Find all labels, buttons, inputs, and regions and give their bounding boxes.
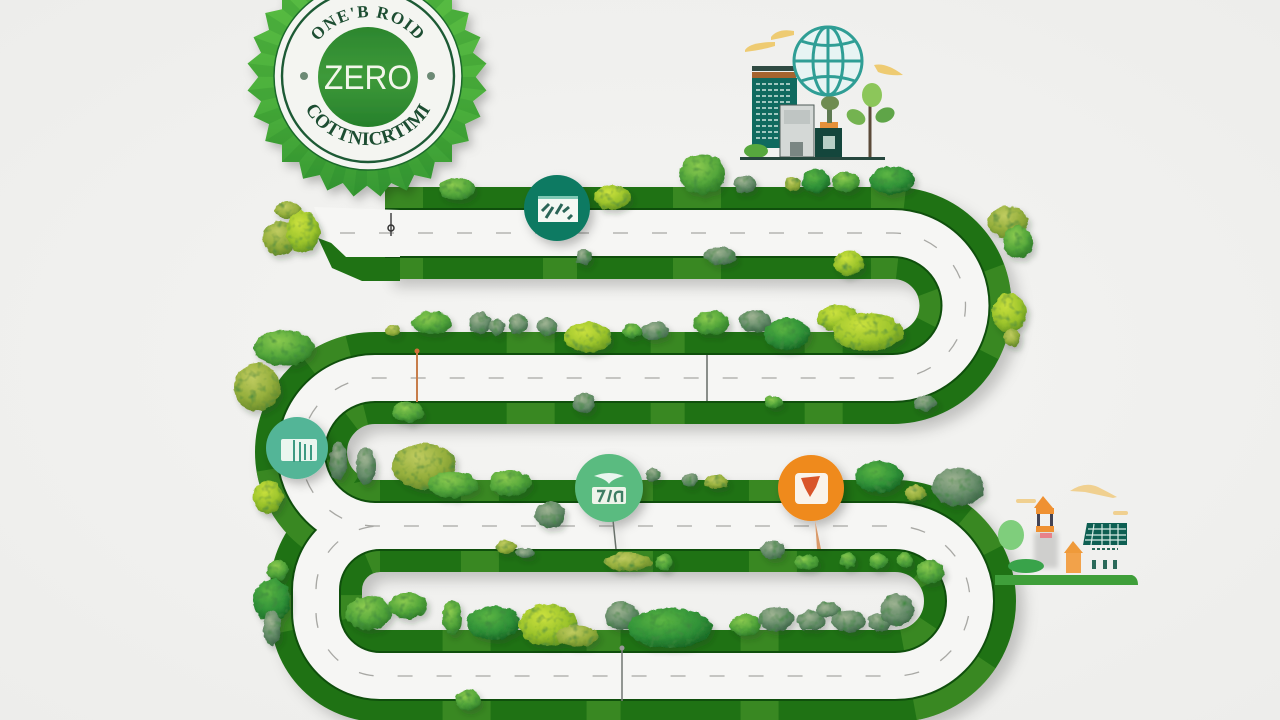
icon: document [538, 196, 578, 222]
illustration: green energy village [995, 485, 1138, 585]
grey building [780, 105, 814, 157]
bushes: below road 3 [496, 540, 944, 584]
dark block with planter [815, 96, 842, 157]
post: grey divider [706, 355, 708, 401]
marker 3: green icon with stem [575, 454, 643, 549]
badge: starburst [240, 0, 494, 204]
badge: top arc text: ONE'B ROID [312, 6, 423, 39]
illustration: city with globe [740, 27, 903, 160]
bushes: top edge of road 1 [438, 154, 915, 209]
badge: zero label: ZERO [324, 59, 412, 97]
post: orange marker [414, 348, 420, 402]
bushes: top edge of road 2 [386, 305, 903, 352]
icon: road sign [592, 473, 626, 504]
post: lower divider [620, 646, 624, 701]
solar panel [1083, 523, 1127, 569]
bushes: below road 2 [392, 393, 936, 422]
marker 1: dark teal icon [524, 175, 590, 241]
badge: white disc [274, 0, 462, 170]
badge: green core [318, 27, 418, 127]
marker 2: light teal icon [266, 417, 328, 479]
badge: bottom arc text: COTTNICRTIMI [308, 103, 430, 146]
clouds [745, 30, 903, 75]
icon: leaf map [795, 473, 828, 504]
shrub [744, 144, 768, 158]
bushes: left and right edge trees [234, 201, 1033, 513]
badge: side dots [300, 72, 435, 80]
orange house [1064, 541, 1083, 573]
winding road [301, 207, 978, 684]
shrubs [1008, 559, 1044, 573]
orange tower [1034, 496, 1054, 538]
bushes: top edge of road 3 [329, 442, 984, 528]
bushes: below road 1 [576, 247, 864, 275]
road posts [388, 213, 707, 701]
badge: inner ring [282, 0, 454, 162]
bushes: lower left and bottom [253, 560, 481, 710]
icon: card [281, 439, 317, 462]
smoke [1034, 532, 1058, 568]
ground base [995, 575, 1138, 585]
post: start pin [388, 213, 394, 236]
ground line [740, 157, 885, 160]
green tree [998, 520, 1024, 550]
badge: zero [248, 0, 493, 204]
bushes: top edge of road 4 [346, 593, 914, 648]
globe [794, 27, 862, 95]
clouds [1016, 485, 1128, 515]
sapling [844, 83, 897, 157]
office tower [752, 66, 797, 148]
marker 4: orange icon with stem [778, 455, 844, 549]
